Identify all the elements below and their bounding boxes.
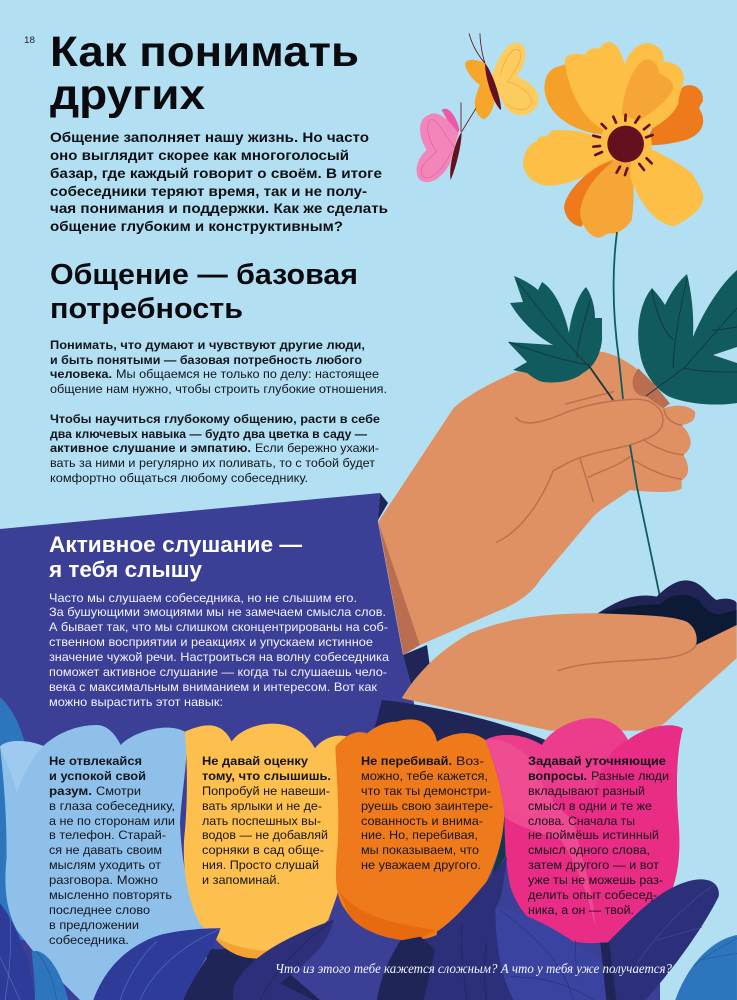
tip text: do not judge: лать поспешных вы- [202,815,321,828]
tip text: do not get distracted: в глаза собеседнику, [49,800,175,813]
intro text [50,130,388,234]
title: Как понимать [50,28,359,76]
tip text: do not get distracted: разум. [49,785,92,798]
tip text: do not judge: вать ярлыки и не де- [202,800,322,813]
panel: purple sleeve background [0,493,430,1000]
text block: need paragraph one: человека. [50,368,112,381]
tulip: orange [335,719,505,941]
text block: need paragraph two [50,413,381,485]
illustration: background leaves [0,697,660,1000]
illustration: upper hand holding the flower [378,352,695,655]
tip text: do not get distracted: в предложении [49,919,139,932]
tip text: do not get distracted: Не отвлекайся [49,755,142,768]
text block: need paragraph two: комфортно общаться любому собеседнику. [50,472,308,485]
text block: need paragraph one: Мы общаемся не только по делу: настоящее [116,368,379,381]
heading: active listening: Активное слушание — [49,532,302,557]
tip text: do not judge: Не давай оценку [202,755,309,768]
tip text: do not interrupt: можно, тебе кажется, [361,770,488,783]
tip text: do not judge: тому, что слышишь. [202,770,331,783]
title: других [50,71,205,119]
tip text: ask clarifying questions: ника, а он — твой. [528,904,634,917]
tulip: yellow [184,724,357,959]
tip text: do not interrupt: не уважаем другого. [361,859,481,872]
text block: active listening: поможет активное слушание — когда ты слушаешь чело- [49,666,387,679]
illustration: left leaves [508,276,613,400]
text block: active listening: века с максимальным вниманием и интересом. Вот как [49,681,378,694]
tip text: ask clarifying questions: Разные люди [591,770,669,783]
tip text: do not get distracted: ся не давать своим [49,844,162,857]
tip text: do not interrupt: что так ты демонстри- [361,785,491,798]
tip text: ask clarifying questions [528,755,669,917]
tip text: do not get distracted [49,755,175,947]
tip text: do not judge: ния. Просто слушай [202,859,319,872]
tip text: ask clarifying questions: не поймёшь истинный [528,829,659,842]
illustration: flower head [523,42,703,238]
text block: need paragraph two: Чтобы научиться глубокому общению, расти в себе [50,413,381,426]
tip text: do not judge: Попробуй не навеши- [202,785,330,798]
tulip: light blue [0,725,207,1000]
heading: active listening: я тебя слышу [48,557,203,582]
tip text: ask clarifying questions: слова. Сначала ты [528,815,635,828]
text block: active listening: Часто мы слушаем собеседника, но не слышим его. [49,592,357,605]
intro text: Общение заполняет нашу жизнь. Но часто [50,130,369,145]
tulip: pink [485,718,683,943]
tip text: do not judge: сорняки в сад обще- [202,844,324,857]
text block: active listening [49,592,390,709]
illustration: right leaves [638,270,737,405]
heading: basic need: потребность [50,293,243,325]
tip text: do not judge [202,755,331,887]
tip text: do not get distracted: а не по сторонам или [49,815,175,828]
text block: need paragraph one: Понимать, что думают и чувствуют другие люди, [50,339,365,352]
text block: active listening: значение чужой речи. Настроиться на волну собеседника [49,651,390,664]
text block: active listening: можно вырастить этот навык: [49,696,223,709]
tip text: do not get distracted: мысленно повторять [49,889,172,902]
intro text: общение глубоким и конструктивным? [50,219,343,234]
illustration: front leaves [0,857,737,1000]
text block: need paragraph one: общение нам нужно, чтобы строить глубокие отношения. [50,383,387,396]
intro text: оно выглядит скорее как многоголосый [50,148,349,163]
tip text: do not interrupt: Воз- [456,755,484,768]
illustration: butterflies [417,33,539,182]
tip text: do not interrupt: Не перебивай. [361,755,452,768]
tip text: do not get distracted: собеседника. [49,934,129,947]
intro text: базар, где каждый говорит о своём. В итоге [50,166,383,181]
tip text: do not interrupt: ние. Но, перебивая, [361,829,478,842]
tip text: do not judge: водов — не добавляй [202,829,328,842]
illustration: soil in the palm [597,580,737,645]
page number: 18 [24,35,35,46]
tip text: ask clarifying questions: уже ты не можешь раз- [528,874,663,887]
tip text: do not get distracted: Смотри [96,785,141,798]
text block: active listening: ственном восприятии и реакциях и упускаем истинное [49,636,373,649]
tip text: ask clarifying questions: смысл одного слова, [528,844,650,857]
title [50,28,359,119]
tip text: do not interrupt: руешь свою заинтере- [361,800,493,813]
illustration: dark cuff of the lower sleeve [370,700,550,810]
text block: need paragraph two: Если бережно ухажи- [255,442,379,455]
heading: basic need [50,259,358,325]
text block: need paragraph two: два ключевых навыка — будто два цветка в саду — [50,428,367,441]
tip text: do not get distracted: последнее слово [49,904,151,917]
tip text: do not judge: и запоминай. [202,874,280,887]
text block: active listening: А бывает так, что мы слишком сконцентрированы на соб- [49,621,388,634]
tip text: ask clarifying questions: вкладывают разный [528,785,645,798]
heading: basic need: Общение — базовая [50,259,358,291]
text block: need paragraph two: вать за ними и регулярно их поливать, то с тобой будет [50,457,376,470]
tip text: do not interrupt: сованность и внима- [361,815,483,828]
text block: need paragraph one: и быть понятыми — базовая потребность любого [50,354,362,367]
intro text: собеседники теряют время, так и не полу- [50,184,367,199]
text block: need paragraph one [50,339,387,396]
tip text: do not interrupt: мы показываем, что [361,844,480,857]
tip text: ask clarifying questions: делить опыт собесед- [528,889,657,902]
tip text: do not get distracted: и успокой свой [49,770,146,783]
heading: active listening [48,532,302,582]
handwritten question: Что из этого тебе кажется сложным? А что у тебя уже получается? [275,962,672,977]
tip text: ask clarifying questions: вопросы. [528,770,587,783]
tip text: do not interrupt [361,755,493,872]
tip text: ask clarifying questions: Задавай уточняющие [528,755,667,768]
illustration: flower stem [613,232,660,597]
intro text: чая понимания и поддержки. Как же сделать [50,201,388,216]
illustration: lower hand [402,613,737,731]
text block: need paragraph two: активное слушание и эмпатию. [50,442,251,455]
tip text: do not get distracted: разговора. Можно [49,874,159,887]
tip text: ask clarifying questions: смысл в одни и те же [528,800,652,813]
tip text: do not get distracted: мыслям уходить от [49,859,162,872]
tip text: do not get distracted: в телефон. Старай- [49,829,166,842]
tip text: ask clarifying questions: затем другого — и вот [528,859,660,872]
text block: active listening: За бушующими эмоциями мы не замечаем смысла слов. [49,606,386,619]
